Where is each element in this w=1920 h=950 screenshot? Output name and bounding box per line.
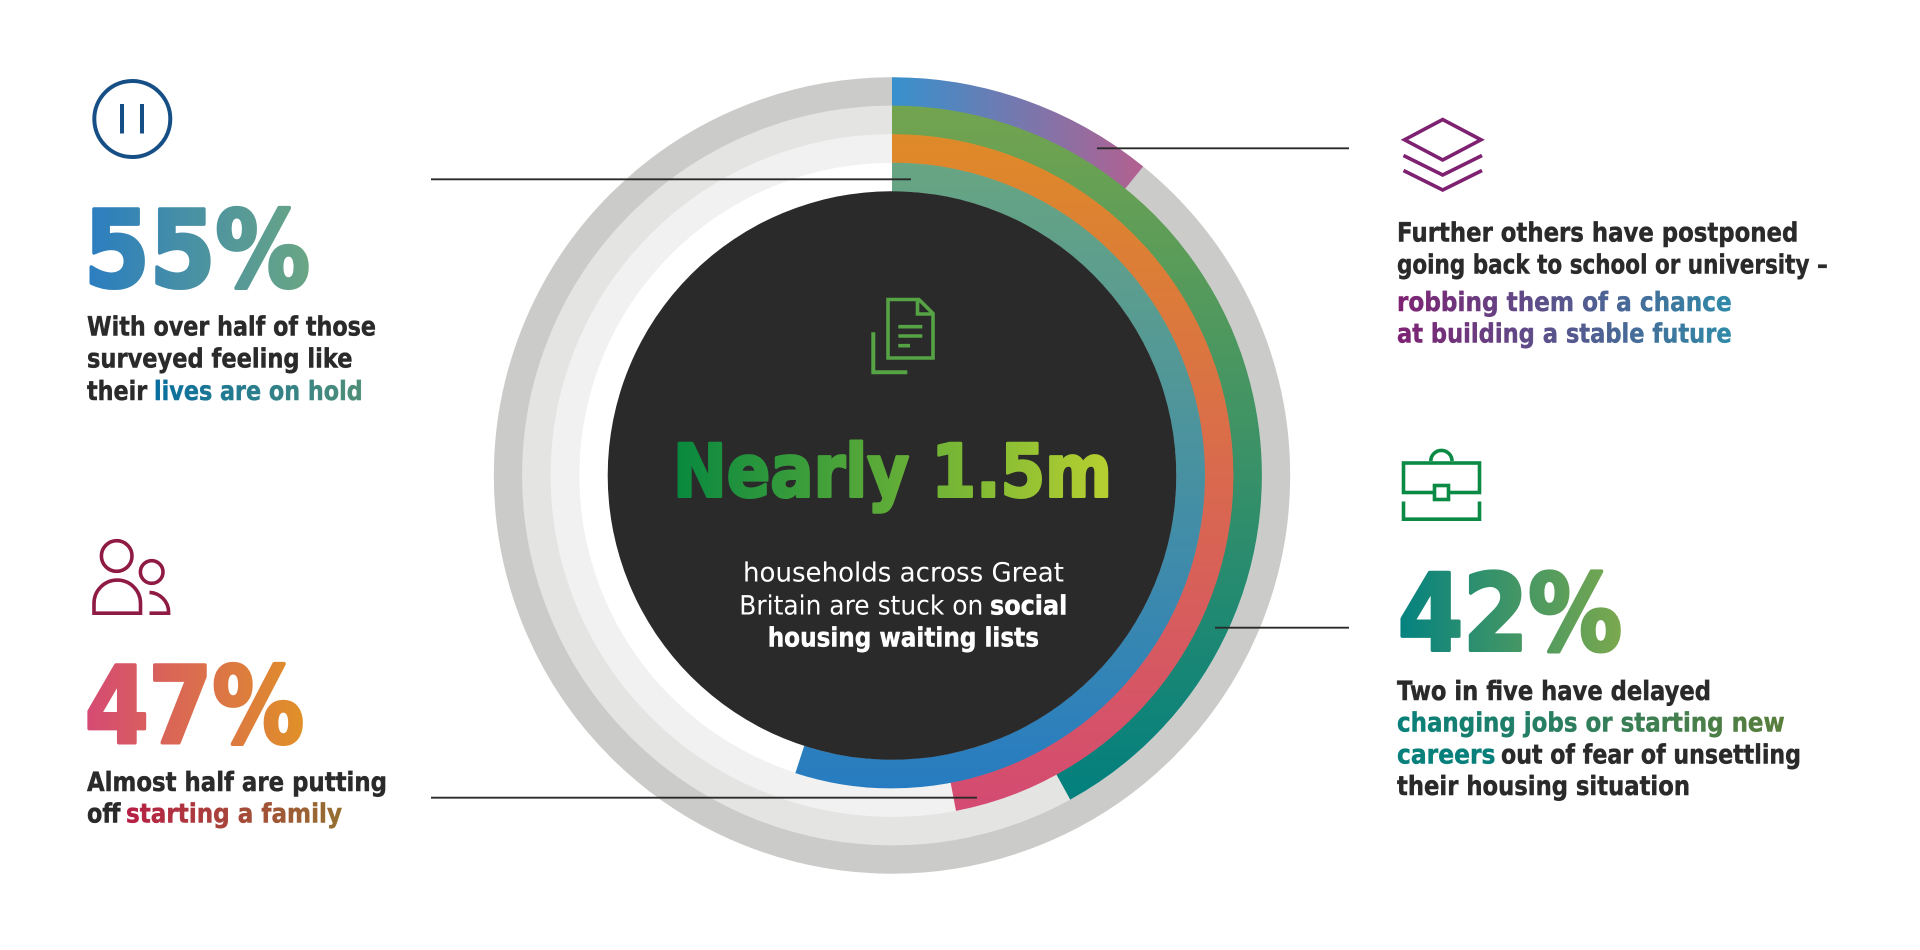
heading: Nearly 1.5m: Nearly 1.5m [673,430,1112,514]
stat: 47%: 47% [85,644,304,768]
text: 42% description: Two in five have delayed [1397,676,1711,707]
icon: briefcase [1404,450,1480,519]
text: 47% description: starting a family [126,799,342,830]
icon: pause [94,81,170,157]
text: 42% description: out of fear of unsettling [1501,739,1801,770]
radial chart: concentric progress rings [508,92,1276,859]
leader line: further education [1097,147,1349,149]
text: 55% description: their [87,376,147,407]
text block: centre description: housing waiting lists [768,623,1039,654]
leader line: 47% [431,797,977,799]
text: 55% description: lives are on hold [154,376,363,407]
text: education description: going back to school or university – [1397,249,1828,280]
panel: centre dark circle [608,191,1176,760]
arc: further education ring [892,92,1134,178]
icon: documents [873,300,933,372]
text: education description [1397,218,1828,350]
text: 47% description [87,767,387,830]
text: education description: robbing them of a chance [1397,287,1732,318]
text: 42% description: their housing situation [1397,771,1690,802]
leader line: 42% [1215,627,1349,629]
text: 55% description: With over half of those [87,312,376,342]
text: education description: at building a stable future [1397,319,1732,350]
text block: centre description: social [990,590,1067,621]
icon: stacked layers [1404,120,1482,190]
panel: 42% changing jobs [1397,450,1801,802]
arc: 47% family ring [892,148,1219,797]
text: 47% description: Almost half are putting [87,767,387,798]
stat: 42%: 42% [1398,552,1622,675]
text: 42% description [1397,676,1801,802]
text: 55% description [87,312,376,407]
track rings [508,92,1276,859]
text: 42% description: changing jobs or starting new [1397,708,1785,739]
icon: people [94,541,169,613]
panel: 55% lives on hold [84,81,376,407]
text block: centre description [739,558,1067,654]
text block: centre description: households across Great [743,558,1064,589]
panel: further education postponed [1397,120,1828,350]
panel: 47% starting a family [85,541,387,830]
leader line: 55% [431,178,911,180]
text block: centre description: Britain are stuck on [739,590,983,621]
text: 55% description: surveyed feeling like [87,344,352,374]
stat: 55%: 55% [84,189,310,312]
text: 47% description: off [87,799,121,830]
text: education description: Further others have postponed [1397,218,1798,249]
arc: 55% lives on hold ring [800,177,1191,774]
arc: 42% careers ring [892,120,1247,787]
text: 42% description: careers [1397,739,1496,770]
